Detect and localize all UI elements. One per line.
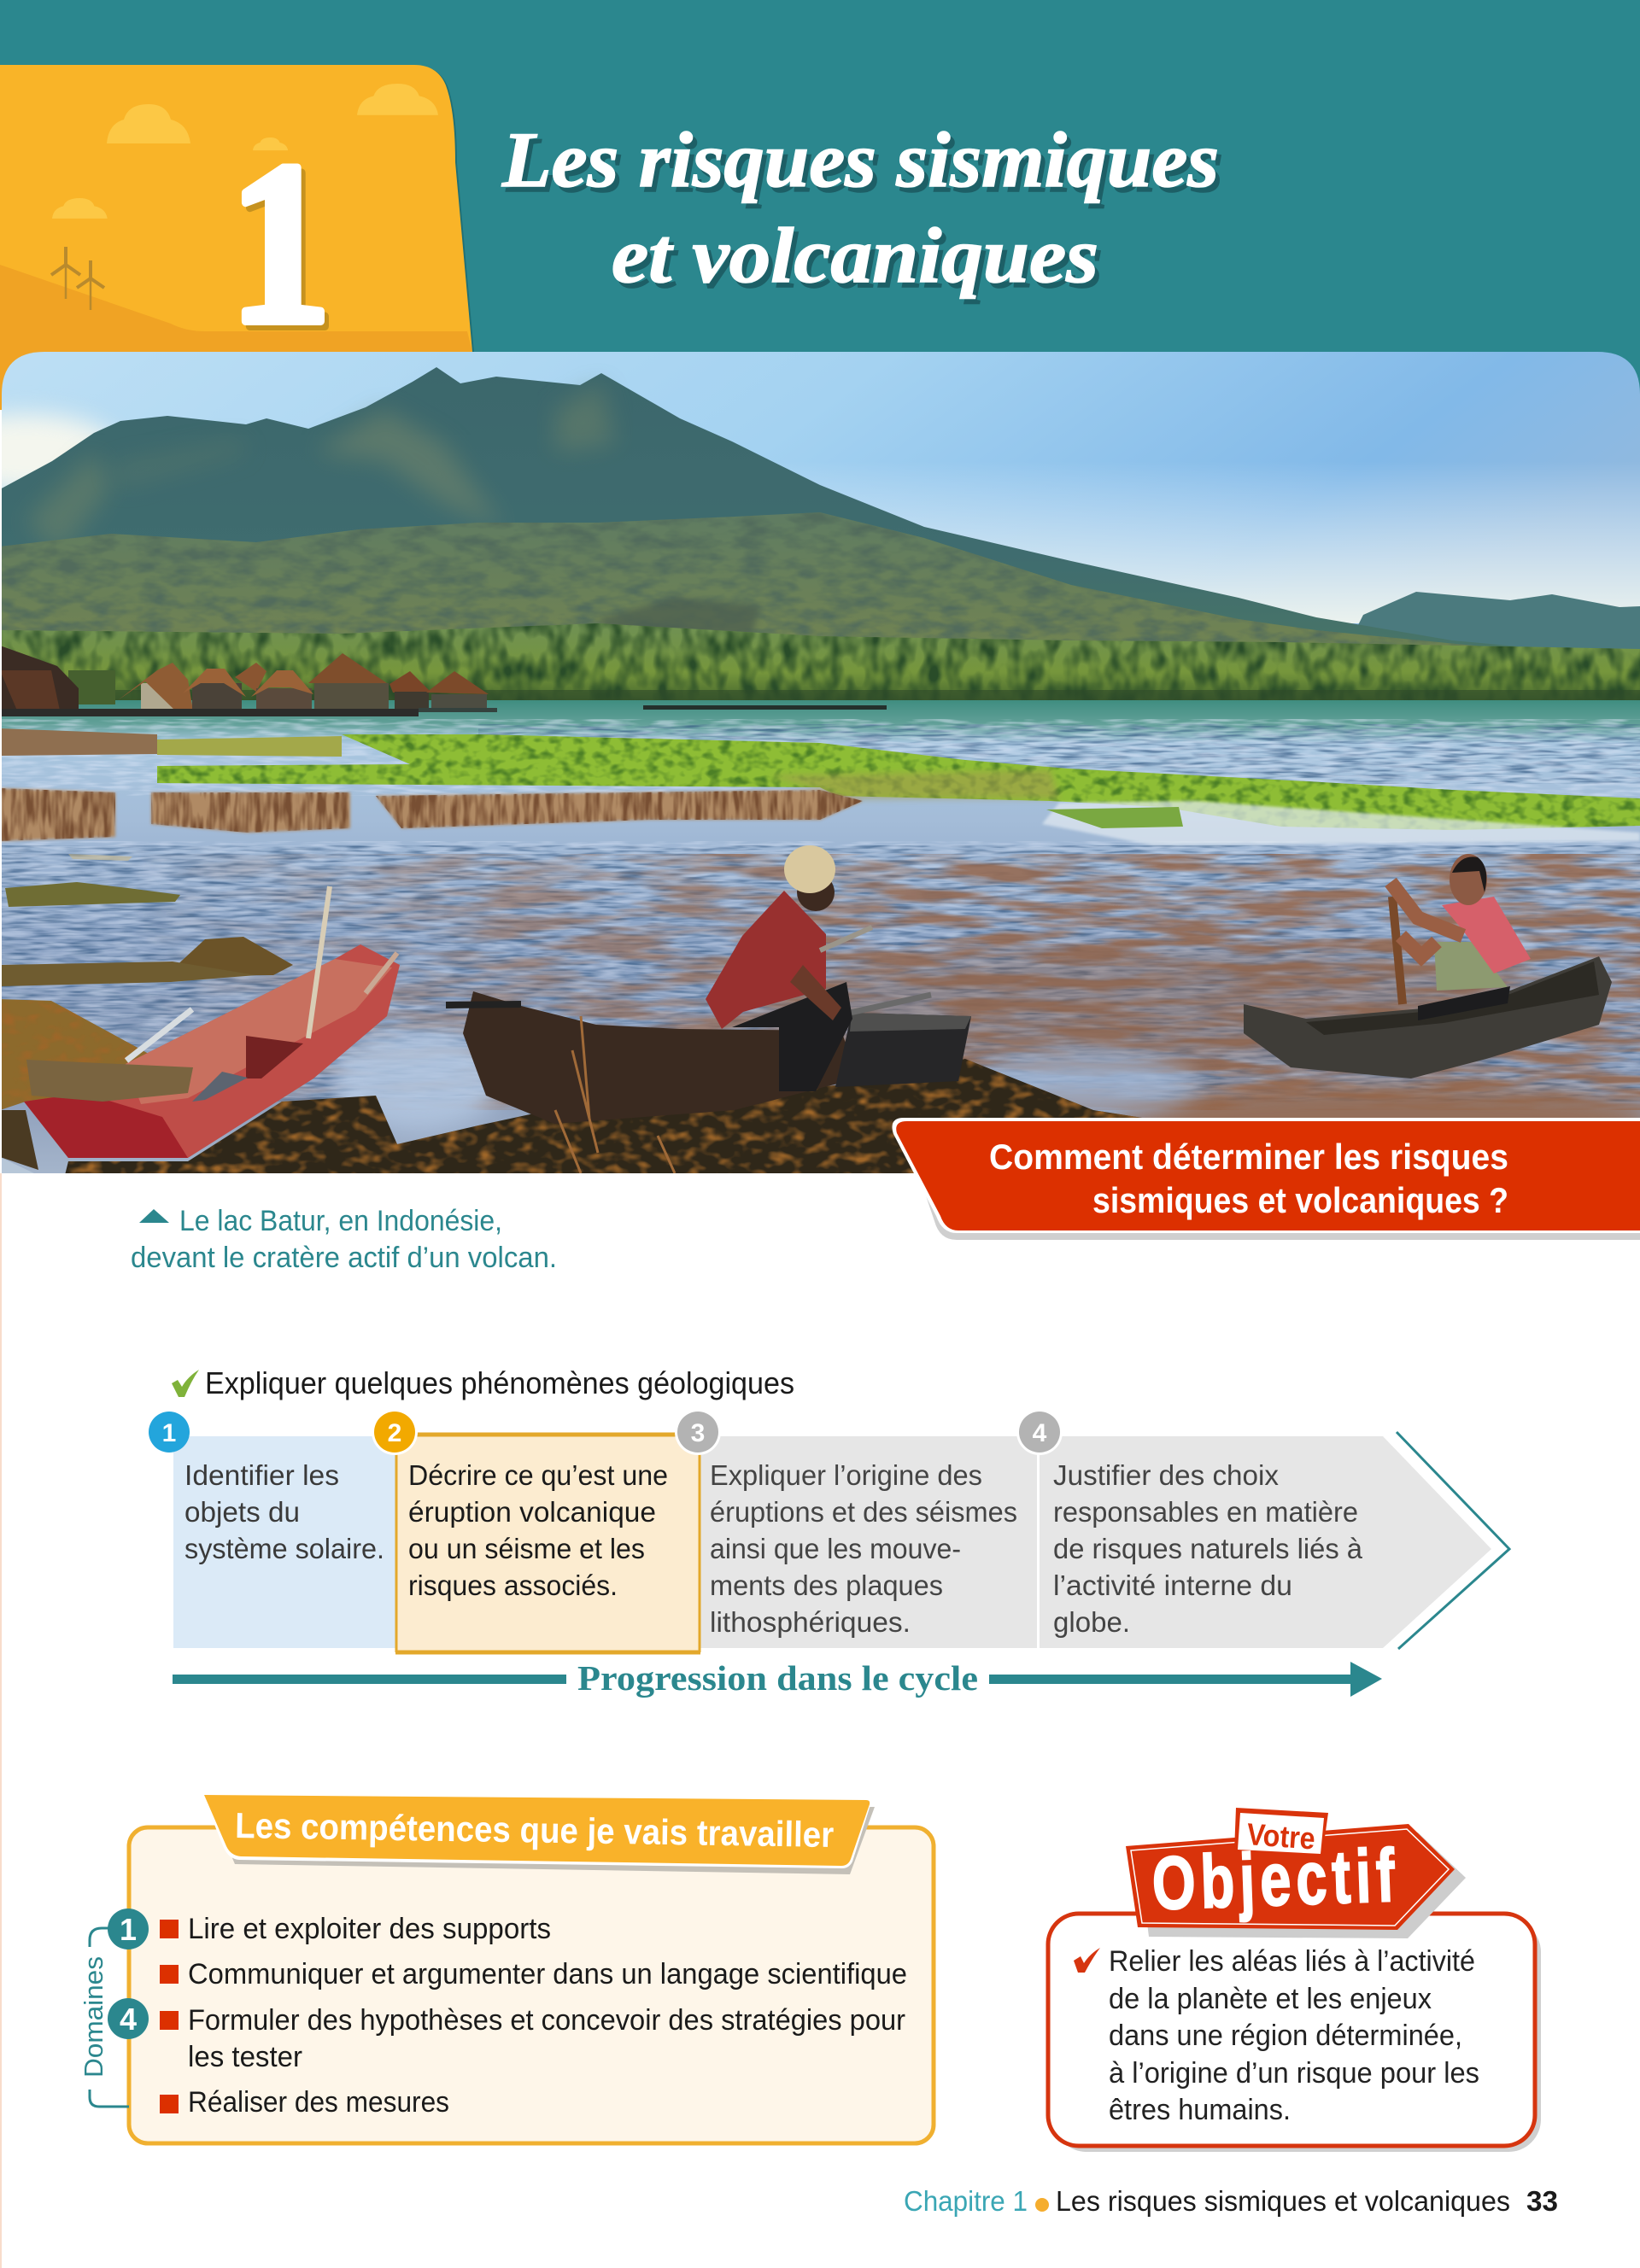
step 1 panel: Identifier les bbox=[184, 1459, 339, 1491]
photo: lac Batur and volcano bbox=[0, 352, 1640, 1178]
skills list: Lire et exploiter des supports bbox=[188, 1913, 551, 1945]
objective text: Relier les aléas liés à l’activité bbox=[1109, 1945, 1475, 1978]
step 3 and 4 arrow panel: l’activité interne du bbox=[1053, 1569, 1292, 1601]
wooden canoe bbox=[446, 991, 858, 1173]
step 2 panel: Décrire ce qu’est une bbox=[408, 1459, 668, 1491]
step 3 and 4 arrow panel: ainsi que les mouve- bbox=[710, 1533, 961, 1564]
domaines bracket: Domaines bbox=[79, 1956, 108, 2078]
skills list: Formuler des hypothèses et concevoir des stratégies pour bbox=[188, 2004, 905, 2037]
step 1 panel bbox=[173, 1436, 395, 1648]
forest bbox=[0, 623, 1640, 704]
skills list: Réaliser des mesures bbox=[188, 2086, 449, 2119]
progression arrow bbox=[173, 1658, 1382, 1698]
step 2 panel: ou un séisme et les bbox=[408, 1533, 645, 1564]
step badges: 4 bbox=[1033, 1419, 1047, 1447]
step badges: 3 bbox=[691, 1419, 705, 1447]
footer: Les risques sismiques et volcaniques bbox=[1056, 2185, 1510, 2217]
photo caption: Le lac Batur, en Indonésie, bbox=[179, 1205, 502, 1237]
step 3 and 4 arrow panel: lithosphériques. bbox=[710, 1606, 911, 1638]
canoe on the water bbox=[1244, 956, 1612, 1078]
question banner: Comment déterminer les risques bbox=[989, 1137, 1508, 1177]
step 2 panel: risques associés. bbox=[408, 1569, 618, 1601]
step 2 panel: éruption volcanique bbox=[408, 1496, 656, 1528]
heading ribbon bbox=[202, 1793, 875, 1874]
step 3 and 4 arrow panel: globe. bbox=[1053, 1606, 1130, 1638]
step 3 and 4 arrow panel: Expliquer l’origine des bbox=[710, 1459, 982, 1491]
step 1 panel: système solaire. bbox=[184, 1533, 384, 1564]
objective text: dans une région déterminée, bbox=[1109, 2020, 1462, 2052]
heading ribbon: Les compétences que je vais travailler bbox=[235, 1805, 835, 1855]
seated woman bbox=[706, 845, 872, 1091]
title: et volcaniques bbox=[612, 212, 1098, 299]
objectif sign bbox=[1126, 1808, 1466, 1938]
distant ridge bbox=[1358, 592, 1640, 649]
woman paddling bbox=[1391, 854, 1531, 1020]
volcano bbox=[2, 367, 1519, 647]
photo caption: devant le cratère actif d’un volcan. bbox=[131, 1242, 557, 1274]
objective text: de la planète et les enjeux bbox=[1109, 1983, 1432, 2015]
step 3 and 4 arrow panel: ments des plaques bbox=[710, 1569, 943, 1601]
step 3 and 4 arrow panel: responsables en matière bbox=[1053, 1496, 1358, 1528]
red boat bbox=[24, 886, 400, 1158]
objective text: à l’origine d’un risque pour les bbox=[1109, 2057, 1479, 2090]
sky bbox=[2, 352, 1640, 625]
bucket bbox=[835, 995, 971, 1087]
domaines bracket: 1 bbox=[120, 1912, 137, 1947]
objectif sign: Votre bbox=[1245, 1816, 1316, 1856]
question banner: sismiques et volcaniques ? bbox=[1092, 1180, 1508, 1220]
step badges: 1 bbox=[162, 1419, 176, 1447]
icon: check mark bbox=[1074, 1948, 1100, 1973]
step 3 and 4 arrow panel: éruptions et des séismes bbox=[710, 1496, 1017, 1528]
village huts bbox=[0, 646, 497, 716]
step 3 and 4 arrow panel: Justifier des choix bbox=[1053, 1459, 1279, 1491]
competency heading: Expliquer quelques phénomènes géologiques bbox=[205, 1365, 794, 1400]
objective text bbox=[1109, 1945, 1479, 2126]
step badges: 2 bbox=[388, 1419, 401, 1447]
grass and reeds bbox=[0, 728, 1640, 907]
chapter tab bbox=[0, 65, 474, 411]
footer: Chapitre 1 bbox=[904, 2185, 1028, 2217]
question banner bbox=[892, 1118, 1640, 1240]
photo caption bbox=[131, 1205, 557, 1274]
skills list: les tester bbox=[188, 2041, 302, 2073]
panel: compétences bbox=[79, 1793, 934, 2143]
progression arrow: Progression dans le cycle bbox=[577, 1658, 978, 1698]
skills list bbox=[160, 1913, 907, 2119]
lake water bbox=[0, 700, 1640, 1178]
header band bbox=[0, 0, 1640, 411]
title bbox=[501, 116, 1219, 299]
title: Les risques sismiques bbox=[501, 116, 1219, 203]
chevron bbox=[1397, 1432, 1509, 1649]
step 3 and 4 arrow panel bbox=[700, 1436, 1491, 1648]
panel: objectif bbox=[1048, 1808, 1541, 2152]
skills list: Communiquer et argumenter dans un langage scientifique bbox=[188, 1958, 907, 1990]
page edge bbox=[0, 1173, 2, 2268]
progression chart bbox=[149, 1409, 1509, 1652]
domaines bracket bbox=[79, 1909, 149, 2107]
step 3 and 4 arrow panel: de risques naturels liés à bbox=[1053, 1533, 1363, 1564]
lower slopes bbox=[2, 512, 1477, 646]
objective text: êtres humains. bbox=[1109, 2094, 1291, 2126]
step 1 panel: objets du bbox=[184, 1496, 300, 1528]
icon: wind turbines bbox=[51, 247, 104, 310]
objectif sign: Objectif bbox=[1151, 1833, 1401, 1926]
domaines bracket: 4 bbox=[120, 2002, 137, 2037]
chapter number: 1 bbox=[229, 114, 331, 371]
floating platform bbox=[643, 705, 887, 710]
step badges bbox=[149, 1409, 1063, 1455]
footer: 33 bbox=[1526, 2185, 1558, 2217]
step 2 panel bbox=[395, 1435, 700, 1652]
shoreline bbox=[2, 937, 1142, 1173]
